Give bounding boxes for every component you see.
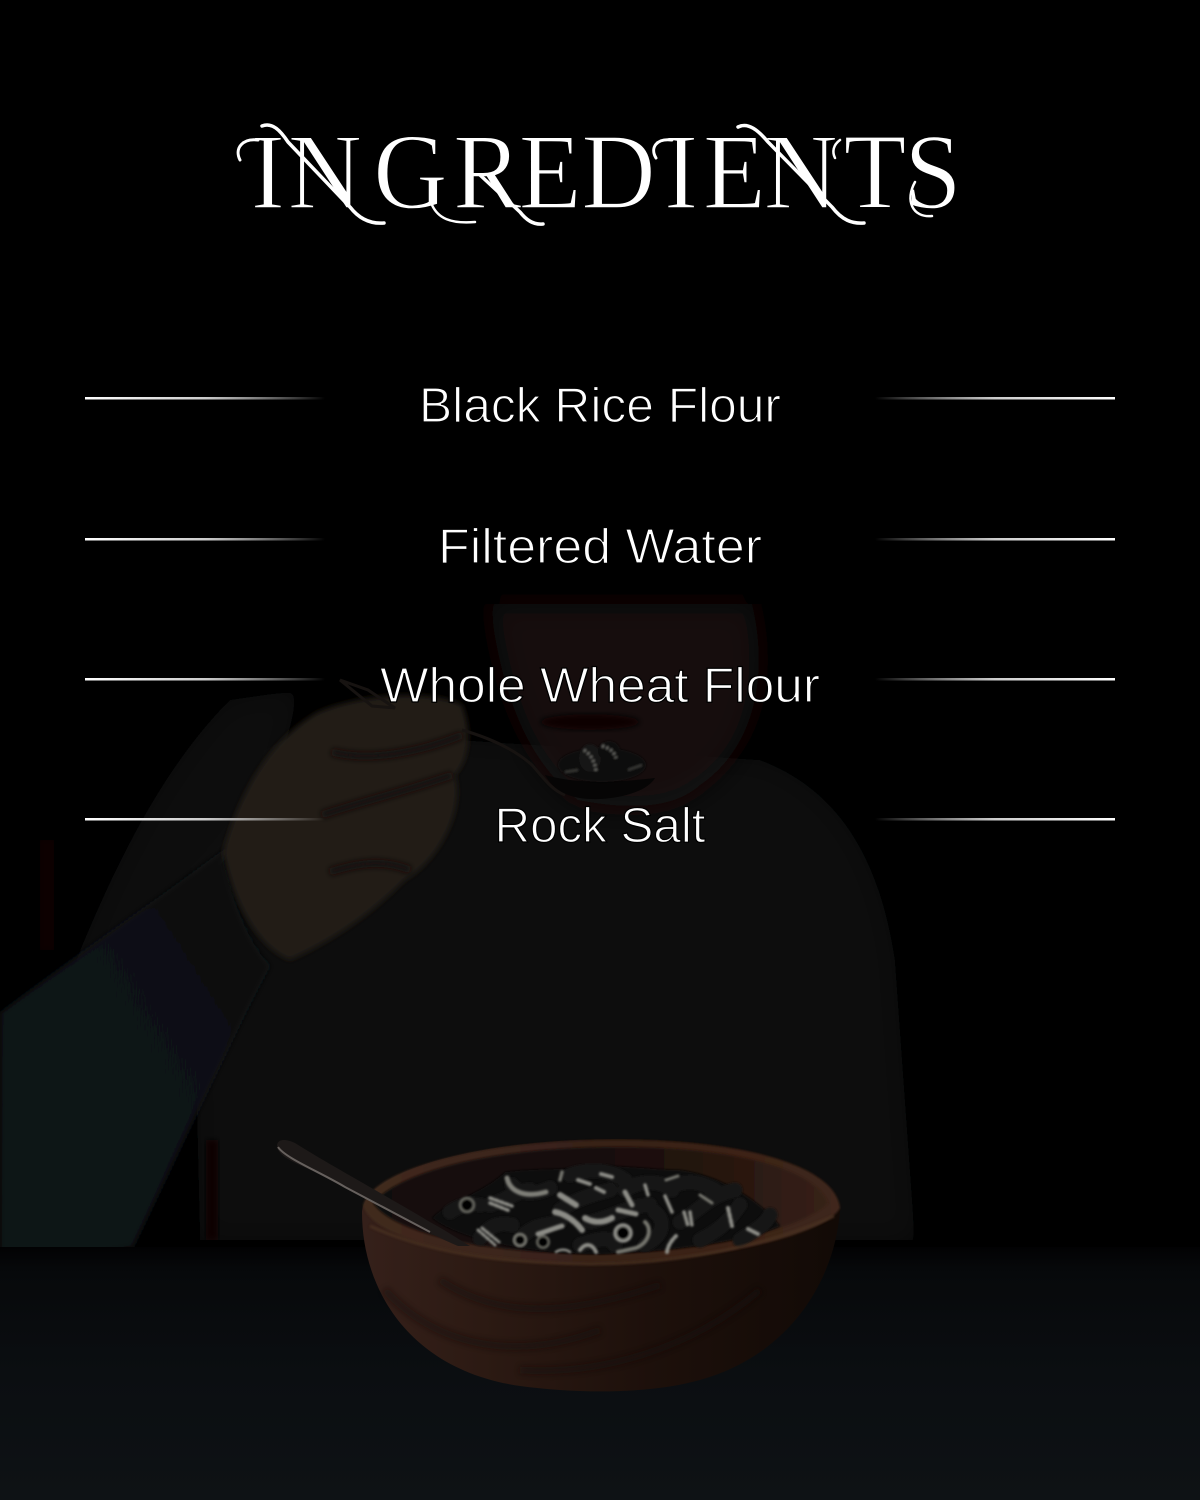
- sweater torso: [190, 723, 915, 1240]
- spoon handle: [340, 680, 565, 795]
- chair leg: [40, 840, 54, 950]
- pasta mound: [432, 1166, 780, 1254]
- label: Whole Wheat Flour: [380, 659, 820, 713]
- sleeve arm: [0, 845, 270, 1270]
- bowl outer: [362, 1139, 840, 1391]
- hand: [223, 695, 468, 960]
- face: [490, 604, 759, 806]
- second chair leg: [206, 1140, 218, 1240]
- spoon in bowl: [277, 1140, 470, 1246]
- left rule: [85, 678, 325, 680]
- wood grain: [385, 1280, 760, 1371]
- label: Black Rice Flour: [419, 379, 781, 433]
- title swashes: [238, 125, 932, 224]
- spoon pasta: [558, 741, 646, 782]
- bowl front rim highlight: [370, 1216, 834, 1264]
- spoon bowl: [545, 775, 655, 799]
- pasta highlights: [460, 1172, 758, 1252]
- label: Filtered Water: [438, 520, 762, 574]
- table: [0, 1247, 1200, 1500]
- right rule: [875, 818, 1115, 820]
- finger shadows: [322, 735, 462, 872]
- right rule: [875, 678, 1115, 680]
- bowl rim: [363, 1140, 840, 1263]
- upper arm: [60, 690, 300, 1000]
- right rule: [875, 538, 1115, 540]
- pasta pieces: [450, 1171, 770, 1245]
- left rule: [85, 538, 325, 540]
- lips: [540, 714, 640, 730]
- wooden bowl with pasta: [277, 1139, 840, 1391]
- label: Rock Salt: [494, 799, 706, 853]
- bowl inner: [373, 1147, 828, 1254]
- right rule: [875, 397, 1115, 400]
- left rule: [85, 818, 325, 820]
- left rule: [85, 397, 325, 400]
- person eating: [0, 604, 915, 1270]
- title text: INGREDIENTS: [251, 112, 961, 232]
- title: [238, 112, 961, 232]
